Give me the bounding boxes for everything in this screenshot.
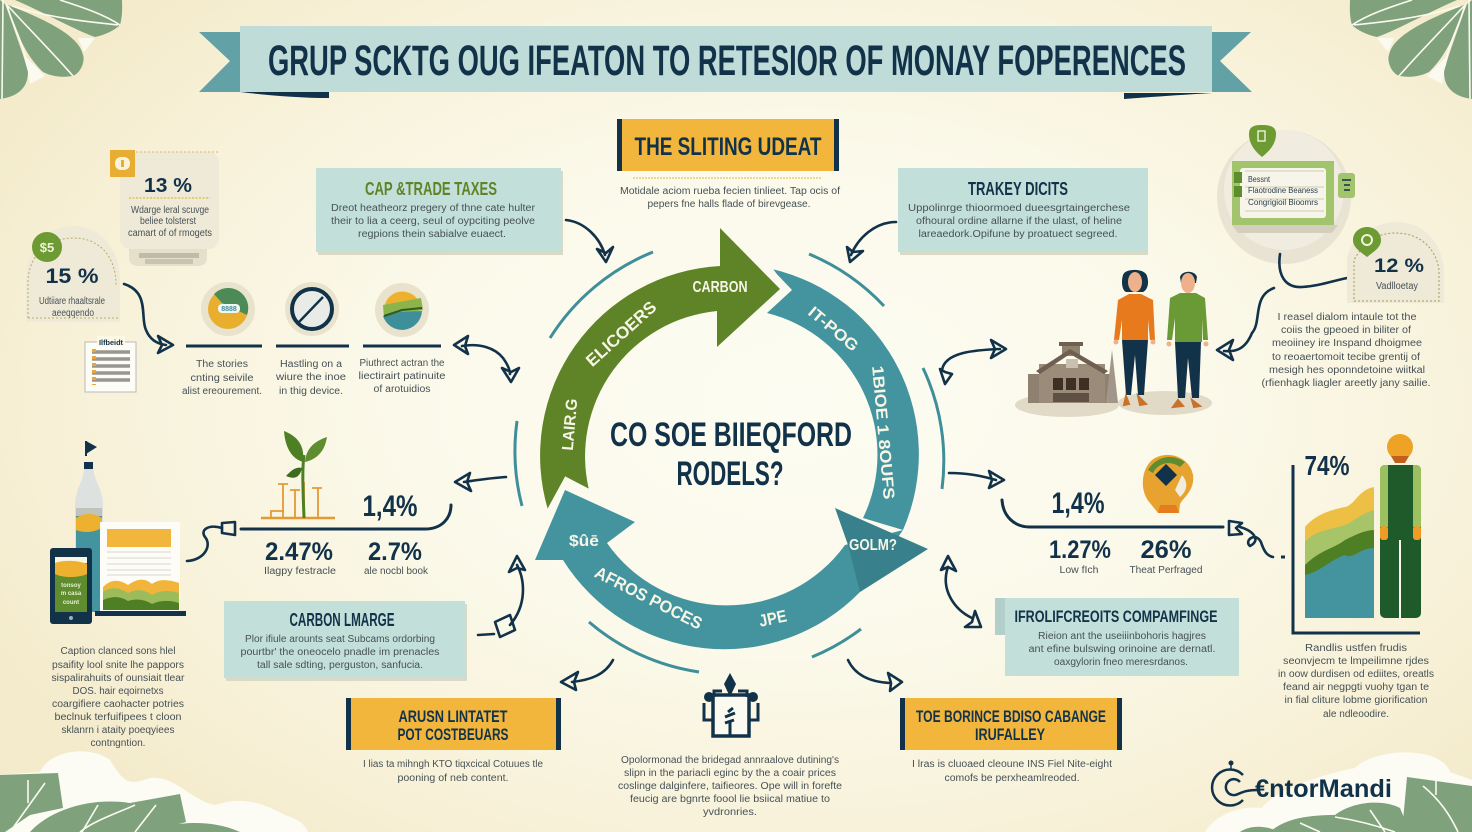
body text: I lras is cluoaed cleoune INS Fiel Nite-eight [912, 759, 1112, 770]
body text [908, 203, 1130, 240]
bottle [75, 441, 103, 612]
icon: green pin [1353, 227, 1381, 257]
text block: upper right: I reasel dialom intaule tot the [1278, 312, 1417, 323]
decorative ring arcs [515, 252, 944, 672]
body text [363, 759, 543, 784]
certificate text: Congrigioil Bioomrs [1248, 198, 1318, 207]
caption 1: alist ereourement. [182, 386, 262, 397]
ring labels: GOLM? [849, 537, 897, 554]
stat captions: Ilagpy festracle [264, 566, 336, 577]
building [1028, 342, 1118, 403]
text block: lower left: sispalirahuits of ounsiait tlear [52, 673, 185, 684]
panel: the sliting udeat [617, 119, 840, 210]
text block: lower left [52, 646, 185, 749]
text block: bottom center: coslinge dalginfere, taifieores. Ope will in forefte [618, 781, 842, 792]
text block: chart caption: in oow durdisen od ediites, oreatls [1278, 669, 1434, 680]
icon: landscape [375, 283, 429, 337]
caption 3 [358, 358, 446, 395]
certificate text [1248, 175, 1318, 207]
stat captions [1060, 565, 1202, 576]
value: 1,4%: 1,4% [362, 490, 418, 523]
value: 2.7%: 2.7% [368, 538, 422, 566]
icon: pen and plant frame [704, 673, 758, 736]
ring labels [560, 279, 897, 633]
certificate text: Flaotrodine Beaness [1248, 186, 1318, 195]
text block: bottom center: feucig are bgnrte foool lie bsiical matiue to [630, 794, 830, 805]
icon: green pin [1249, 125, 1276, 157]
document [95, 522, 186, 616]
body text: Dreot heatheorz pregery of thne cate hulter [331, 203, 536, 214]
panel: arusn lintatet [346, 698, 561, 784]
arrow: devices to left stats [187, 522, 235, 561]
text block: lower left: coargifiere caohacter potries [52, 699, 184, 710]
panel: 13% stat card [110, 150, 219, 266]
caption 2: wiure the inoe [275, 372, 346, 383]
icon: gauge [201, 282, 255, 336]
stat captions: Theat Perfraged [1130, 565, 1202, 576]
teal arrow: right segment [767, 269, 919, 530]
heading: CAP &TRADE TAXES [365, 179, 497, 199]
icon: green badge: $5 [40, 240, 54, 255]
panel: carbon lmarge [224, 601, 467, 681]
body text [1028, 631, 1216, 668]
stat captions: Low fIch [1060, 565, 1098, 576]
woman [1114, 270, 1156, 405]
caption 3: of arotuidios [374, 384, 430, 395]
decoration: top-left leaves [0, 0, 122, 99]
panel: cap and trade taxes [316, 168, 563, 255]
text block: lower left: sklanrn i ataity poeqyiees [62, 725, 174, 736]
text block: chart caption: feand air negpgti vuohy tgan te [1283, 682, 1429, 693]
body text: Motidale aciom rueba fecien tinlieet. Tap ocis of [620, 186, 840, 197]
connector: medallion to 12% card [1279, 254, 1352, 287]
arrow: double arrow near icons [454, 336, 519, 382]
body text [331, 203, 536, 240]
text block: bottom center: slipn in the pariacli eginc by the a coair prices [624, 768, 836, 779]
text block: upper right: coiis the gpeoed in biliter of [1281, 325, 1411, 336]
body text: I lias ta mihngh KTO tiqxcical Cotuues tle [363, 759, 543, 770]
decoration: top-right leaves [1350, 0, 1472, 99]
body text: pooning of neb content. [398, 773, 508, 784]
icon: small document: Ilfbeidt [99, 340, 124, 347]
icon: gauge: 8888 [221, 306, 237, 313]
arrow: ring to toborince box [848, 660, 902, 691]
stat value: 12 % [1374, 256, 1424, 277]
caption 3: Piuthrect actran the [360, 358, 445, 369]
text block: bottom center: Opolormonad the bridegad annraalove dutining's [621, 755, 839, 766]
panel: credits box [995, 598, 1239, 676]
text block: chart caption: Randlis ustfen frudis [1305, 643, 1407, 654]
caption 1 [182, 359, 262, 397]
center question: RODELS? [676, 455, 784, 493]
arrow: ring to arusn box [561, 660, 613, 690]
stat value: 13 % [144, 175, 192, 197]
arrowhead dark fold [835, 508, 928, 592]
body text [240, 634, 440, 671]
text block: chart caption: in fial cliture lobme giorification [1284, 695, 1428, 706]
stat caption: Udtiiare rhaaltsrale [39, 296, 105, 307]
chart value: 74% [1304, 450, 1350, 481]
text block: upper right [1262, 312, 1430, 389]
panel: trakey dicits [898, 168, 1148, 255]
ring labels: 1BIOE 1 8OUFS [868, 365, 897, 500]
chart: area chart with worker [1293, 434, 1421, 633]
heading [916, 707, 1106, 744]
text block: upper right: (rfienhagk liagler areetly jany sailie. [1262, 378, 1430, 389]
value: 26%: 26% [1140, 536, 1192, 564]
text block: lower left: contngntion. [90, 738, 146, 749]
ring labels: CARBON [692, 279, 748, 296]
text block: lower left: beclnuk terfuifipees t cloon [54, 712, 182, 723]
stat captions: ale nocbl book [364, 566, 429, 577]
heading: TRAKEY DICITS [968, 179, 1068, 199]
body text: oaxgylorin fneo meresrdanos. [1054, 657, 1188, 668]
icon row captions [182, 346, 446, 397]
icon row [201, 282, 429, 337]
panel: toborince box [900, 698, 1122, 784]
illustration: people and building [1015, 270, 1212, 417]
heading: ARUSN LINTATET [398, 707, 508, 726]
heading: TOE BORINCE BDISO CABANGE [916, 707, 1106, 726]
body text: Rieion ant the useiiinbohoris hagjres [1038, 631, 1206, 642]
stat captions [264, 566, 429, 577]
panel: 15% stat card [26, 226, 120, 322]
text block: chart caption: ale ndleoodire. [1323, 709, 1389, 720]
text block: bottom center [618, 755, 842, 818]
arrow: ring to credits box [941, 556, 981, 627]
stat caption: Wdarge leral scuvge [131, 205, 209, 216]
heading: IFROLIFCREOITS COMPAMFINGE [1014, 607, 1218, 626]
text block: chart caption: seonvjecm te lmpeilimne rjdes [1283, 656, 1429, 667]
central cycle diagram [535, 228, 928, 649]
title banner [199, 26, 1252, 99]
text block: upper right: meoiiney ire Inspand dhoigmee [1272, 338, 1422, 349]
body text: ofhoural ordine allarne if the ulast, of heline [916, 216, 1122, 227]
text block: upper right: to reoaertomoit tecibe grentij of [1272, 352, 1420, 363]
ring labels: JPE [757, 606, 789, 631]
arrow: chart to right stats [1229, 521, 1285, 557]
caption 1: The stories [196, 359, 248, 370]
ring labels: ELICOERS [582, 297, 660, 370]
text block: chart caption [1278, 643, 1434, 720]
body text: Uppolinrge thioormoed dueesgrtaingerchese [908, 203, 1130, 214]
body text: Plor ifiule arounts seat Subcams ordorbing [245, 634, 435, 645]
icon: small document [85, 336, 136, 392]
arrow: cap box to ring [566, 220, 613, 262]
body text: regpions thein sabialve euaect. [358, 229, 506, 240]
teal arrow: bottom segment [535, 490, 903, 649]
body text: lareaedork.Opifune by proatuect segreed. [918, 229, 1118, 240]
logo [1212, 760, 1392, 806]
body text: comofs be perxheamlreoded. [944, 773, 1080, 784]
phone: count [63, 600, 79, 606]
center question: CO SOE BIIEQFORD [610, 416, 852, 454]
phone: m casa [61, 591, 82, 597]
arrow: ring to people [940, 340, 1006, 384]
stat caption [128, 205, 212, 239]
heading: CARBON LMARGE [290, 610, 394, 630]
caption 2 [275, 359, 346, 397]
arrow: carbon box to ring [478, 556, 525, 637]
body text [620, 186, 840, 210]
phone [50, 548, 92, 624]
decoration: bottom-left leaves [0, 751, 308, 832]
stat caption: camart of of rmogets [128, 228, 212, 239]
text block: lower left: Caption clanced sons hlel [60, 646, 176, 657]
caption 3: liectirairt patinuite [358, 371, 446, 382]
text block: upper right: mesigh hes oponndetoine wiitkal [1269, 365, 1425, 376]
green arrow [540, 228, 780, 510]
body text [912, 759, 1112, 784]
text block: lower left: psaifity lool snite lhe pappors [52, 660, 184, 671]
ring labels: LAIR.G [560, 398, 581, 451]
body text: their to lia a ceerg, seul of oypciting peolve [331, 216, 535, 227]
arrow: to people [1217, 288, 1274, 360]
value: 2.47%: 2.47% [265, 538, 333, 566]
certificate text: Bessnt [1248, 175, 1271, 184]
ring labels: AFROS POCES [592, 563, 705, 633]
heading: IRUFALLEY [975, 725, 1045, 744]
icon: seedling with bars [261, 431, 335, 518]
stat value: 15 % [46, 265, 99, 288]
text block: lower left: DOS. hair eqoirnetxs [72, 686, 164, 697]
heading: POT COSTBEUARS [398, 725, 508, 744]
phone: tonsoy [61, 583, 81, 589]
worker figure [1380, 434, 1421, 618]
caption 2: in thig device. [279, 386, 343, 397]
value: 1,4%: 1,4% [1052, 487, 1104, 520]
panel: left stats [241, 431, 451, 577]
panel: 12% stat card [1347, 222, 1444, 303]
logo: €ntorMandi [1255, 775, 1392, 803]
value: 1.27%: 1.27% [1049, 536, 1111, 564]
heading [398, 707, 508, 744]
caption 1: cnting seivile [190, 373, 254, 384]
arrow: ring to left stats [455, 473, 506, 491]
icon: certificate medallion [1217, 125, 1355, 264]
ring labels: $ûē [569, 533, 599, 550]
arrow: 15% card to icons [124, 284, 173, 353]
icon: yellow badge [110, 150, 135, 177]
illustration: bottle phone and document [50, 441, 186, 624]
body text: ant efine bulswing orinoine are dernatl. [1028, 644, 1216, 655]
icon: clock tool [285, 282, 339, 336]
body text: tall sale sdting, perguston, sanfucia. [257, 660, 423, 671]
text block: bottom center: yvdronries. [703, 807, 757, 818]
arrow: trakey box to ring [847, 222, 896, 262]
arrow: ring to right stats [949, 471, 1004, 488]
icon: gear globe [1143, 455, 1193, 513]
stat caption: Vadlloetay [1376, 281, 1418, 292]
stat caption: aeeqqendo [52, 308, 94, 319]
stat caption [39, 296, 105, 319]
body text: pourtbr' the oneocelo pnadle im prenacles [240, 647, 440, 658]
body text: pepers fne halls flade of birevgease. [648, 199, 810, 210]
ring labels: IT-POG [804, 304, 861, 355]
caption 2: Hastling on a [280, 359, 342, 370]
panel: right stats [1002, 455, 1223, 576]
center question [610, 416, 852, 493]
man [1166, 272, 1208, 407]
heading: THE SLITING UDEAT [634, 133, 822, 161]
decoration: bottom-right leaves [1205, 752, 1472, 832]
stat caption: beliee tolsterst [140, 216, 196, 227]
stacked areas [1305, 487, 1374, 618]
